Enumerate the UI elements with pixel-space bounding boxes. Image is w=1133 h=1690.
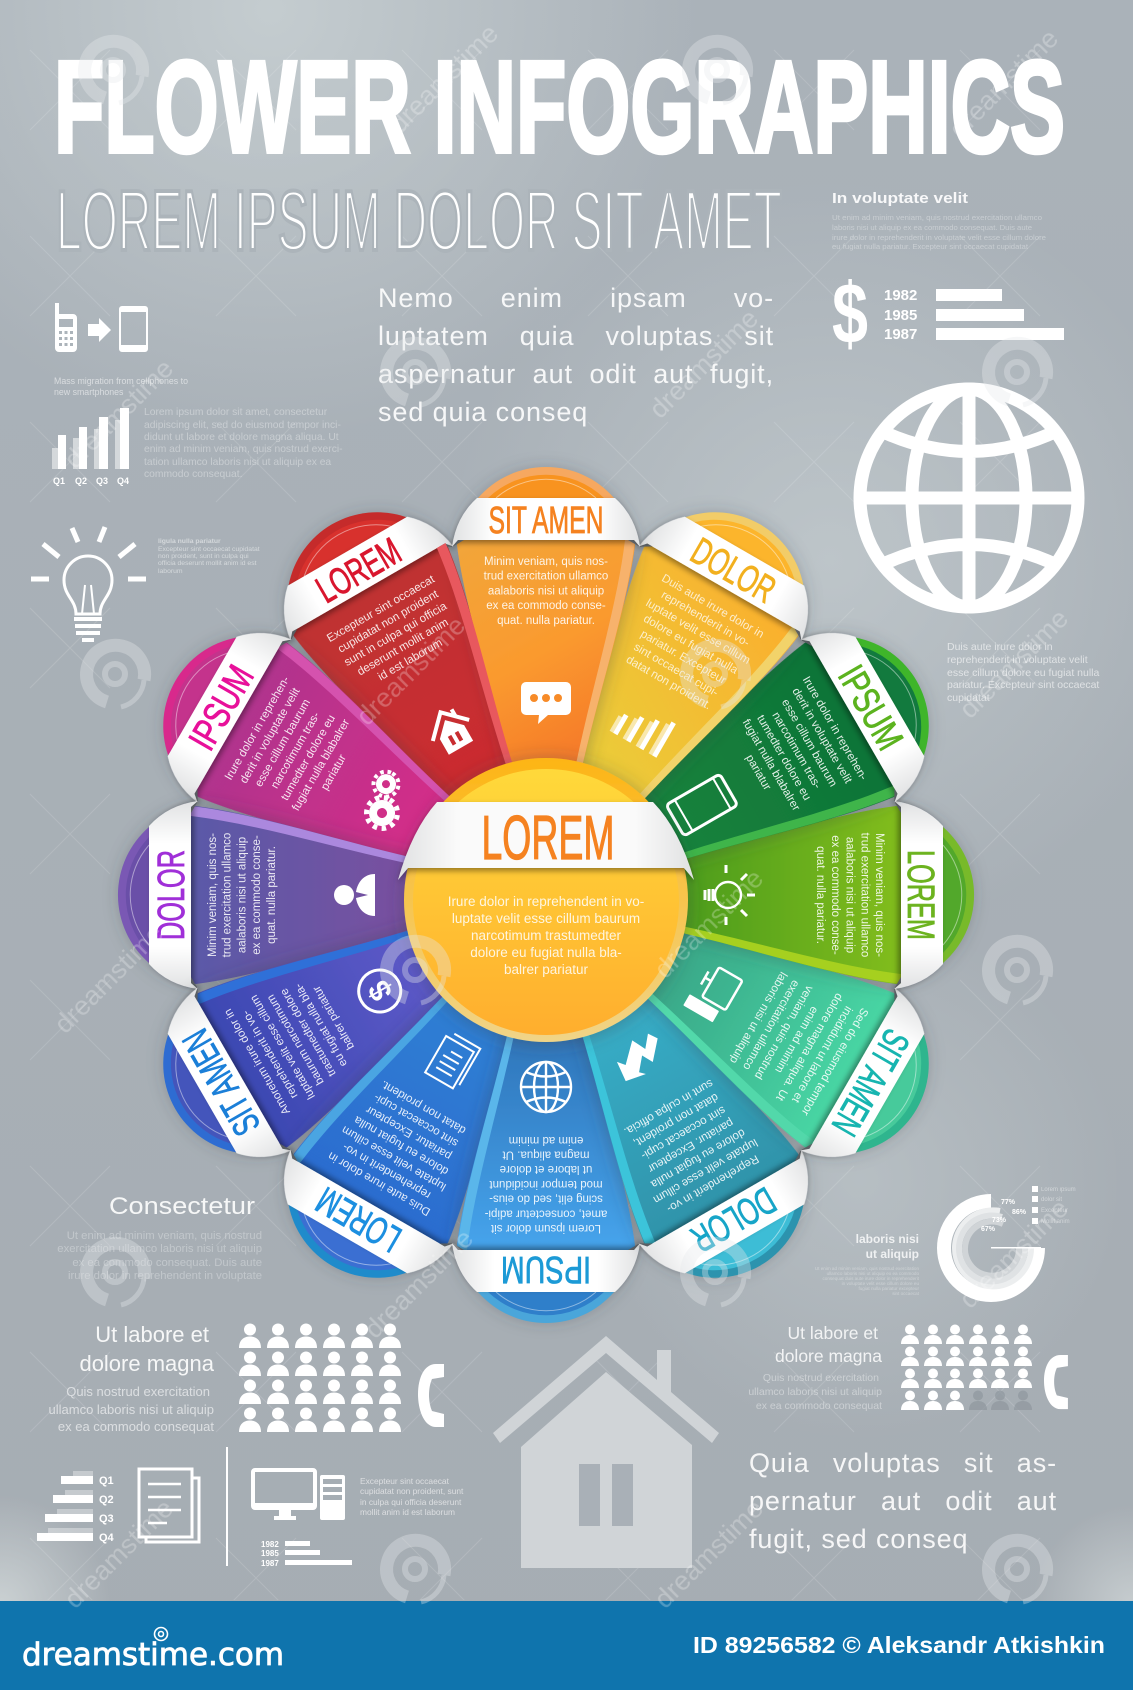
text block: lorem ipsum beside chart: Lorem ipsum dolor sit amet, consectetur <box>144 407 328 418</box>
petal text: sunt in culpa officia. <box>622 1077 715 1137</box>
watermark overlay: dreamstime <box>48 918 169 1039</box>
petal text: dolore eu fugiat nulla <box>352 1113 451 1177</box>
text block: Excepteur small: in culpa qui officia deserunt <box>360 1497 462 1507</box>
petal text: Minim veniam, quis nos- <box>873 833 885 957</box>
text block: Quis nostrud right: ex ea commodo consequat <box>756 1400 882 1412</box>
watermark overlay: dreamstime <box>58 353 179 474</box>
petal: DOLOR teal blue (150 deg) <box>515 935 841 1313</box>
text block: mass migration caption: new smartphones <box>54 387 124 397</box>
flower chart <box>118 467 974 1323</box>
text block: lorem ipsum beside chart: commodo consequat. <box>144 469 242 480</box>
watermark overlay: dreamstime <box>943 23 1064 144</box>
petal text: dolore magna aliqua. Ut <box>773 991 845 1103</box>
divider line <box>226 1447 228 1566</box>
petal text: reprehenderit in vo- <box>240 1008 300 1100</box>
petal text: datat non proident. <box>379 1078 468 1136</box>
icon: speech bubble <box>521 682 571 724</box>
petal: IPSUM magenta (300 deg) <box>128 600 506 926</box>
petal text: narcotimum tras- <box>269 710 323 791</box>
central circle <box>398 758 694 1042</box>
petal text: Minim veniam, quis nos- <box>484 556 608 568</box>
petal text: derit in voluptate velit <box>789 686 854 786</box>
watermark overlay: dreamstime <box>953 603 1074 724</box>
text block: tiny donut caption: sint occaecat <box>892 1291 920 1296</box>
petal text: quat. nulla pariatur. <box>266 846 278 944</box>
heading: Ut labore et right: dolore magna <box>775 1346 882 1366</box>
text block: tiny donut caption: consequat duis aute irure dolor in reprehenderit <box>822 1276 920 1281</box>
icon: telephone handset right <box>1044 1355 1068 1409</box>
petal text: luptate velit esse cillum <box>340 1123 448 1193</box>
watermark overlay: dreamstime <box>358 1223 479 1344</box>
petal text: reprehenderit in vo- <box>341 1140 433 1201</box>
petal: IPSUM blue (180 deg) <box>452 995 640 1323</box>
bar chart: Q1 to Q4: Q4 <box>117 476 129 486</box>
icon: arrow right <box>88 318 111 342</box>
bar chart: small years: 1982 <box>261 1540 279 1549</box>
text block: ligula nulla pariatur <box>158 538 260 575</box>
paragraph: Quia voluptas: fugit, sed conseq <box>749 1524 968 1554</box>
heading: Ut labore et right: Ut labore et <box>788 1323 878 1343</box>
petal text: ut labore et dolore <box>500 1163 592 1175</box>
stacked bars Q1 to Q4: Q2 <box>99 1494 114 1506</box>
bar chart: small years <box>261 1540 352 1568</box>
watermark overlay: dreamstime <box>648 1493 769 1614</box>
petal text: balrer pariatur <box>311 983 357 1051</box>
petal text: eu fugiat nulla bla- <box>292 981 350 1068</box>
petal text: pariatur. Excepteur <box>638 628 728 687</box>
petal text: luptate velit esse cillum <box>248 993 318 1101</box>
heading: In voluptate velit: In voluptate velit <box>832 190 968 207</box>
petal text: luptate velit esse cillum <box>644 597 752 667</box>
donut chart: 73% <box>992 1217 1007 1224</box>
center text: balrer pariatur <box>504 962 589 977</box>
icon: big house <box>493 1336 719 1568</box>
text block: Excepteur small: cupidatat non proident, sunt <box>360 1486 464 1496</box>
paragraph: Nemo enim: luptatem quia voluptas sit <box>378 321 774 351</box>
text block: below globe: cupidatat <box>947 692 990 704</box>
icon: documents <box>139 1469 199 1542</box>
text block: In voluptate velit body: laboris nisi ut aliquip ex ea commodo consequat. Duis aute <box>832 223 1032 232</box>
text block: Quis nostrud left: ullamco laboris nisi ut aliquip <box>49 1402 214 1417</box>
text block: lorem ipsum beside chart: didunt ut labore et dolore magna aliqua. Ut <box>144 432 339 443</box>
icon: small bar chart <box>610 697 676 758</box>
petal text: dolore eu fugiat nulla <box>648 1126 747 1190</box>
text block: Excepteur small: Excepteur sint occaecat <box>360 1476 450 1486</box>
text block: Quis nostrud left: Quis nostrud exercitation <box>66 1384 210 1399</box>
phone migration icons <box>55 303 148 352</box>
petal text: narcotimum tras- <box>769 710 823 791</box>
ribbon label: SIT AMEN <box>175 1022 269 1142</box>
icon: document <box>425 1031 480 1090</box>
petal text: datat non proident. <box>624 654 713 712</box>
icon: light bulb with rays <box>31 527 146 640</box>
text block: tiny donut caption: Ut enim ad minim veniam, quis nostrud exercitation <box>815 1266 919 1271</box>
petal text: derit in voluptate velit <box>238 685 303 786</box>
paragraph: Nemo enim: Nemo enim ipsam vo- <box>378 283 774 313</box>
bar chart: Q1 to Q4: Q2 <box>75 476 87 486</box>
bar chart: years top right: 1985 <box>884 307 917 324</box>
donut chart: 67% <box>981 1226 996 1233</box>
text block: Quis nostrud right <box>748 1372 882 1412</box>
heading: Ut labore et left: dolore magna <box>79 1351 215 1376</box>
petal text: Reprehenderit in vo- <box>664 1152 761 1215</box>
petal text: magna aliqua. Ut <box>502 1148 589 1160</box>
watermark overlay: dreamstime <box>383 18 504 139</box>
petal text: pariatur. Excepteur <box>364 1103 454 1162</box>
text block: Quis nostrud left <box>49 1384 214 1434</box>
footer logo spiral <box>154 1628 168 1640</box>
petal: LOREM blue (210 deg) <box>251 935 577 1313</box>
icon: zigzag arrow <box>610 1029 670 1085</box>
petal text: trud exercitation ullamco <box>858 833 870 957</box>
petal text: sint occaecat cupi- <box>639 1103 727 1162</box>
text block: Consectetur body: irure dolor in reprehendent in voluptate <box>68 1270 262 1282</box>
petal text: scing elit, sed do eius- <box>489 1193 603 1205</box>
icon: smartphone <box>119 306 148 352</box>
heading: Ut labore et left <box>79 1322 215 1376</box>
petal text: dolore eu fugiat nulla <box>641 613 740 677</box>
petal text: Lorem ipsum dolor sit <box>490 1222 601 1234</box>
petal text: trud exercitation ullamco <box>222 833 234 957</box>
petal text: sint occaecat cupi- <box>372 1091 460 1149</box>
petal text: tumedter dolore eu <box>754 713 813 803</box>
text block: Consectetur body: Ut enim ad minim veniam, quis nostrud <box>67 1230 262 1242</box>
icon: desktop computer <box>251 1468 345 1520</box>
footer credit: ID 89256582 © Aleksandr Atkishkin <box>693 1632 1105 1658</box>
ribbon label: LOREM <box>899 850 941 940</box>
center ribbon heading: LOREM <box>482 804 614 873</box>
donut chart: 86% <box>1012 1209 1027 1216</box>
ribbon label: IPSUM <box>181 659 263 757</box>
text block: ligula nulla pariatur: ligula nulla pariatur <box>158 538 221 545</box>
petal text: reprehenderit in vo- <box>659 589 751 650</box>
petal text: Irure dolor in reprehen- <box>223 674 292 782</box>
petal text: aalaboris nisi ut aliquip <box>844 837 856 953</box>
petal text: quat. nulla pariatur. <box>814 846 826 944</box>
donut chart: dolor sit <box>1041 1197 1062 1203</box>
text block: lorem ipsum beside chart: tation ullamco laboris nisi ut aliquip ex ea <box>144 457 331 468</box>
text block: In voluptate velit body: eu fugiat nulla pariatur. Excepteur sint occaecat cupidatat <box>832 242 1028 251</box>
icon: house <box>422 702 479 758</box>
text block: lorem ipsum beside chart: adipiscing elit, sed do eiusmod tempor inci- <box>144 420 341 431</box>
paragraph: Quia voluptas: Quia voluptas sit as- <box>749 1448 1057 1478</box>
petal text: cupidatat non proident <box>336 588 441 656</box>
petal text: sint occaecat cupi- <box>632 641 720 699</box>
footer logo text: dreamstime.com <box>22 1637 284 1673</box>
watermark overlay: dreamstime <box>350 610 471 731</box>
watermark overlay: dreamstime <box>58 1493 179 1614</box>
text block: below globe: pariatur. Excepteur sint occaecat <box>947 679 1099 691</box>
icon: person <box>334 874 375 916</box>
text block: Excepteur small: mollit anim id est laborum <box>360 1507 455 1517</box>
icon: dollar coin: $ <box>361 975 400 1007</box>
heading: Consectetur: Consectetur <box>109 1193 255 1220</box>
icon: large globe <box>860 389 1078 607</box>
petal text: esse cillum baurum <box>253 697 313 789</box>
petal text: trud exercitation ullamco <box>484 571 608 583</box>
text block: tiny donut caption: ullamco laboris nisi ut aliquip ex ea commodo <box>827 1271 919 1276</box>
icon: computer <box>683 961 742 1025</box>
petal text: ex ea commodo conse- <box>829 835 841 955</box>
petal: SIT AMEN indigo (240 deg) <box>128 864 506 1190</box>
petal text: Sed do eiusmod tempor <box>799 1006 870 1118</box>
petal text: ex ea commodo conse- <box>251 835 263 955</box>
petal text: id est laborum <box>376 637 445 683</box>
petal text: incididunt ut labore et <box>789 1004 854 1105</box>
icon: dollar sign: $ <box>832 266 868 362</box>
text block: below globe: reprehenderit in voluptate velit <box>947 654 1088 666</box>
text block: Quis nostrud right: ullamco laboris nisi ut aliquip <box>748 1386 882 1398</box>
petal text: quat. nulla pariatur. <box>497 615 595 627</box>
petal text: deserunt mollit anim <box>355 616 451 678</box>
center text: Irure dolor in reprehendent in vo- <box>448 894 644 909</box>
ribbon label: SIT AMEN <box>823 1022 917 1142</box>
donut chart: Mollit anim <box>1041 1219 1070 1225</box>
text block: ligula nulla pariatur: non proident, sunt in culpa qui <box>158 553 249 560</box>
bar chart: years top right: 1987 <box>884 326 917 343</box>
petal text: esse cillum baurum <box>779 697 839 789</box>
text block: Consectetur body <box>57 1230 262 1282</box>
petal text: mod tempor incididunt <box>489 1178 603 1190</box>
petal text: Irure dolor in reprehen- <box>800 675 869 783</box>
donut chart: 77% <box>1001 1199 1016 1206</box>
petal: DOLOR gold (30 deg) <box>515 477 841 855</box>
paragraph: Nemo enim: aspernatur aut odit aut fugit, <box>378 359 774 389</box>
text block: Consectetur body: exercitation ullamco laboris nisi ut aliquip <box>57 1243 262 1255</box>
icon: globe <box>521 1062 571 1112</box>
petal text: Minim veniam, quis nos- <box>207 833 219 957</box>
ribbon label: DOLOR <box>684 530 782 612</box>
petal text: laboris nisi ut aliquip <box>727 970 789 1065</box>
text block: tiny donut caption <box>815 1266 920 1296</box>
petal text: Amoretum irure dolor in <box>222 1006 293 1117</box>
icon: smartphone <box>666 774 738 836</box>
icon: old cell phone <box>55 303 77 352</box>
petal text: enim ad minim <box>509 1134 583 1146</box>
people grid left <box>239 1324 401 1432</box>
heading: laboris nisi ut aliquip: laboris nisi <box>856 1232 919 1246</box>
paragraph: Nemo enim <box>378 283 774 427</box>
heading: laboris nisi ut aliquip: ut aliquip <box>866 1247 919 1261</box>
bar chart: Q1 to Q4: Q3 <box>96 476 108 486</box>
text block: below globe: esse cillum dolore eu fugiat nulla <box>947 667 1099 679</box>
center text: luptate velit esse cillum baurum <box>452 911 640 926</box>
petal text: ex ea commodo conse- <box>486 600 606 612</box>
petal text: luptate velit esse cillum <box>651 1136 759 1205</box>
text block: Quis nostrud right: Quis nostrud exercitation <box>763 1372 879 1384</box>
stacked bars Q1 to Q4: Q3 <box>99 1513 114 1525</box>
ribbon label: LOREM <box>310 530 408 612</box>
ribbon label: IPSUM <box>829 659 911 757</box>
petal: LOREM red (330 deg) <box>251 477 577 855</box>
ribbon label: DOLOR <box>684 1178 782 1260</box>
text block: below globe: Duis aute irure dolor in <box>947 641 1053 653</box>
petal text: sunt in culpa qui officia <box>342 600 450 669</box>
ribbon label: IPSUM <box>501 1248 591 1290</box>
center text: dolore eu fugiat nulla bla- <box>470 945 622 960</box>
petal text: exercitation ullamco <box>740 978 801 1072</box>
petal text: amet, consectetur adipi- <box>484 1207 607 1219</box>
icon: telephone handset left <box>418 1364 444 1427</box>
text block: tiny donut caption: in voluptate velit esse cillum dolore eu <box>842 1281 919 1286</box>
petal text: fugiat nulla blabalrer <box>740 717 802 813</box>
icon: gears <box>354 767 415 834</box>
text block: In voluptate velit body: irure dolor in reprehenderit in voluptate velit esse cillum dolore <box>832 233 1046 242</box>
text block: In voluptate velit body: Ut enim ad minim veniam, quis nostrud exercitation ullamco <box>832 213 1042 222</box>
center text: narcotimum trastumedter <box>471 928 622 943</box>
icon: dollar coin <box>351 962 408 1020</box>
stacked bars Q1 to Q4 <box>37 1471 115 1544</box>
petal text: baurum narcotimum <box>265 992 327 1087</box>
petal: SIT AMEN teal (120 deg) <box>586 864 964 1190</box>
petal text: fugiat nulla blabalrer <box>290 717 352 813</box>
petal text: aalaboris nisi ut aliquip <box>236 837 248 953</box>
petal text: trastumedter dolore <box>278 986 339 1078</box>
bar chart: Q1 to Q4 <box>52 408 129 486</box>
paragraph: Quia voluptas <box>749 1448 1057 1554</box>
petal: SIT AMEN orange (0 deg) <box>452 467 640 795</box>
text block: Quis nostrud left: ex ea commodo consequat <box>58 1419 214 1434</box>
ribbon label: SIT AMEN <box>488 500 604 542</box>
text block: mass migration caption: Mass migration from cellphones to <box>54 376 188 386</box>
heading: Ut labore et left: Ut labore et <box>95 1322 209 1347</box>
petal: IPSUM dark green (60 deg) <box>586 600 964 926</box>
paragraph: Nemo enim: sed quia conseq <box>378 397 588 427</box>
bar chart: Q1 to Q4: Q1 <box>53 476 65 486</box>
text block: Excepteur small <box>360 1476 464 1517</box>
text block: tiny donut caption: fugiat nulla pariatur excepteur <box>858 1286 919 1291</box>
petal: LOREM light green (90 deg) <box>646 801 974 989</box>
petal text: veniam, quis nostrud <box>752 983 815 1081</box>
watermark overlay: dreamstime <box>643 303 764 424</box>
stacked bars Q1 to Q4: Q1 <box>99 1475 114 1487</box>
petal text: pariatur. Excepteur <box>646 1116 735 1175</box>
people grid right <box>901 1324 1032 1410</box>
petal text: aalaboris nisi ut aliquip <box>488 585 604 597</box>
bar chart: small years: 1985 <box>261 1549 279 1558</box>
donut chart: Lorem ipsum <box>1041 1187 1076 1193</box>
petal text: pariatur <box>319 753 349 792</box>
donut chart <box>944 1186 1076 1295</box>
heading: Ut labore et right <box>775 1323 882 1366</box>
donut chart: Excepteur <box>1041 1208 1068 1214</box>
text block: ligula nulla pariatur: officia deserunt mollit anim id est <box>158 560 257 567</box>
petal text: Duis aute irure dolor in <box>326 1149 433 1218</box>
ribbon label: LOREM <box>310 1178 408 1260</box>
red petal highlight strip <box>389 543 573 796</box>
text block: Consectetur body: ex ea commodo consequat. Duis aute <box>72 1257 262 1269</box>
paragraph: Quia voluptas: pernatur aut odit aut <box>749 1486 1057 1516</box>
text block: ligula nulla pariatur: laborum <box>158 568 183 575</box>
petal text: datat non proident, <box>631 1091 720 1149</box>
icon: small bulb <box>705 865 755 925</box>
text block: ligula nulla pariatur: Excepteur sint occaecat cupidatat <box>158 546 260 553</box>
heading: laboris nisi ut aliquip <box>856 1232 919 1261</box>
petal text: tumedter dolore eu <box>279 713 338 803</box>
bar chart: small years: 1987 <box>261 1559 279 1568</box>
bar chart: years top right <box>884 287 1064 343</box>
petal: DOLOR purple (270 deg) <box>118 801 446 989</box>
petal text: enim ad minim <box>772 1004 820 1075</box>
text block: lorem ipsum beside chart: enim ad minim veniam, quis nostrud exerci- <box>144 444 343 455</box>
petal text: pariatur <box>743 753 773 793</box>
ribbon label: DOLOR <box>151 850 193 940</box>
petal text: Duis aute irure dolor in <box>659 572 766 641</box>
watermark overlay: dreamstime <box>953 1193 1074 1314</box>
bar chart: years top right: 1982 <box>884 287 917 304</box>
petal text: Excepteur sint occaecat <box>325 573 438 645</box>
watermark overlay: dreamstime <box>648 863 769 984</box>
stacked bars Q1 to Q4: Q4 <box>99 1532 115 1544</box>
center ribbon <box>398 802 694 880</box>
footer banner <box>0 1601 1133 1690</box>
